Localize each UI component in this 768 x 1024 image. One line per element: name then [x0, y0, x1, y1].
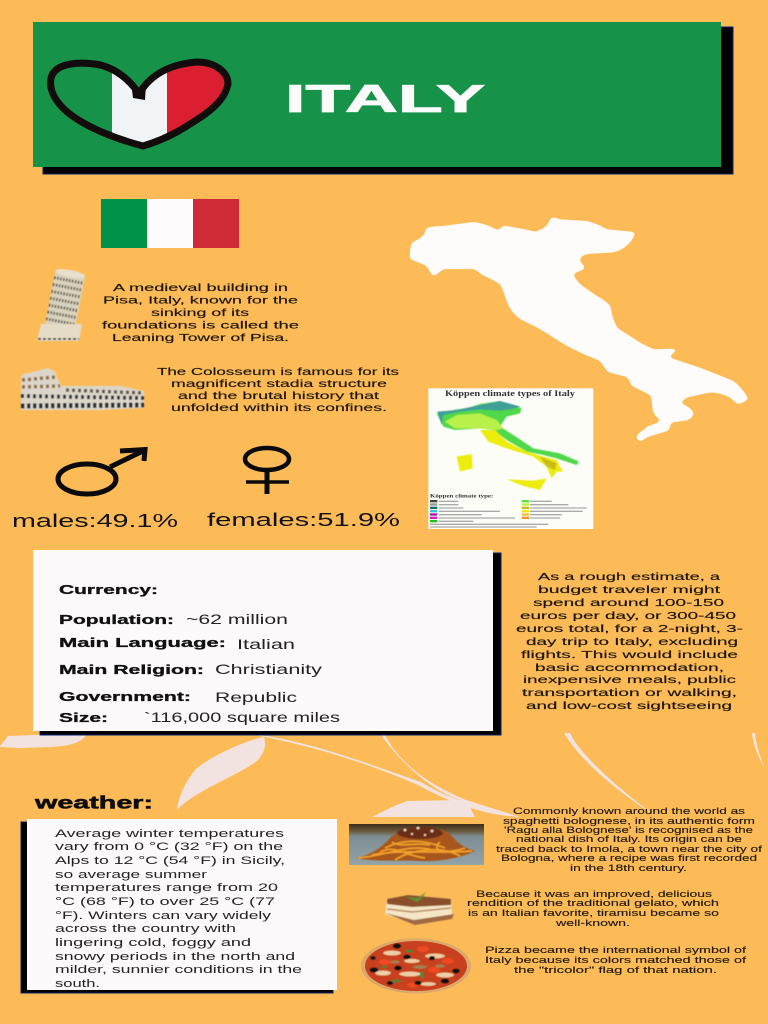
population row: ~62 million: [186, 611, 288, 627]
title text: ITALY: [285, 78, 485, 121]
size row: `116,000 square miles: [144, 709, 340, 725]
panel: weather: °C (68 °F) to over 25 °C (77: [55, 896, 275, 908]
text: travel budget: [516, 571, 744, 712]
climate map image: Köppen climate type:: [430, 495, 494, 500]
map of Italy: [410, 217, 748, 441]
text: Colosseum: The Colosseum is famous for its: [157, 366, 399, 378]
population row: [59, 611, 288, 627]
text: Leaning Tower: foundations is called the: [102, 320, 299, 332]
text: travel budget: euros total, for a 2-night, 3-: [516, 623, 744, 635]
panel: weather: so average summer: [55, 869, 207, 881]
panel: weather: milder, sunnier conditions in the: [55, 964, 302, 976]
religion row: [59, 661, 322, 677]
text: tiramisu: is an Italian favorite, tiramisu became so: [468, 908, 719, 919]
text: Colosseum: magnificent stadia structure: [171, 378, 387, 390]
text: spaghetti bolognese: 'Ragu alla Bolognese' is recognised as the: [504, 825, 753, 836]
currency row: Currency:: [59, 583, 158, 597]
text: Leaning Tower: sinking of its: [151, 307, 249, 319]
religion row: Main Religion:: [59, 663, 204, 677]
text: travel budget: inexpensive meals, public: [523, 674, 736, 686]
text: spaghetti bolognese: spaghetti bolognese, in its authentic form: [503, 816, 755, 827]
religion row: Christianity: [215, 661, 322, 677]
text: Colosseum: [157, 366, 399, 414]
text: spaghetti bolognese: Commonly known around the world as: [513, 806, 745, 817]
text: tiramisu: rendition of the traditional gelato, which: [467, 898, 719, 909]
government row: [59, 689, 297, 705]
image: tiramisu: [385, 892, 454, 925]
text: Colosseum: and the brutal history that: [178, 390, 379, 402]
icon: Leaning Tower of Pisa: [37, 267, 86, 341]
text: Leaning Tower: A medieval building in: [113, 282, 288, 294]
icon: Colosseum: [21, 368, 144, 410]
text: spaghetti bolognese: Bologna, where a recipe was first recorded: [501, 853, 757, 864]
size row: Size:: [59, 711, 108, 725]
icon: Italian flag: [101, 199, 239, 248]
text: spaghetti bolognese: traced back to Imola, a town near the city of: [496, 844, 762, 855]
panel: weather: lingering cold, foggy and: [55, 937, 251, 949]
icon: female symbol: [245, 448, 289, 494]
text: tiramisu: [467, 889, 719, 929]
panel: weather: [21, 819, 337, 993]
climate map image: [428, 388, 593, 529]
panel: weather: Alps to 12 °C (54 °F) in Sicily,: [55, 855, 285, 867]
icon: male symbol: [58, 450, 145, 494]
language row: Italian: [237, 636, 295, 652]
text: travel budget: As a rough estimate, a: [538, 571, 720, 583]
government row: Government:: [59, 690, 191, 704]
text: pizza: Pizza became the international symbol of: [485, 945, 746, 956]
text: pizza: Italy because its colors matched those of: [485, 955, 747, 966]
text: travel budget: basic accommodation,: [535, 662, 724, 674]
text: males percentage: males:49.1%: [12, 510, 178, 531]
text: Leaning Tower: [102, 282, 299, 344]
text: travel budget: transportation or walking,: [522, 687, 737, 699]
language row: [59, 636, 295, 652]
panel: weather: south.: [55, 978, 100, 990]
heading: weather: weather:: [33, 792, 153, 812]
climate map image: Köppen climate types of Italy: [445, 389, 575, 398]
panel: weather: Average winter temperatures: [55, 828, 284, 840]
text: tiramisu: well-known.: [555, 918, 630, 929]
icon: Italian flag heart: [47, 58, 232, 150]
panel: weather: across the country with: [55, 923, 236, 935]
panel: weather: vary from 0 °C (32 °F) on the: [55, 841, 283, 853]
image: spaghetti bolognese: [349, 824, 484, 865]
text: travel budget: spend around 100-150: [533, 597, 724, 609]
text: travel budget: day trip to Italy, excluding: [526, 636, 738, 648]
text: travel budget: budget traveler might: [538, 584, 720, 596]
text: Leaning Tower: Pisa, Italy, known for the: [103, 294, 298, 306]
panel: weather: snowy periods in the north and: [55, 951, 295, 963]
text: spaghetti bolognese: in the 18th century.: [570, 863, 687, 874]
text: spaghetti bolognese: national dish of Italy. Its origin can be: [516, 834, 742, 845]
text: females percentage: females:51.9%: [207, 509, 400, 530]
image: pizza: [361, 938, 471, 994]
panel: weather: °F). Winters can vary widely: [55, 910, 271, 922]
government row: Republic: [215, 689, 297, 705]
size row: [59, 709, 340, 725]
title banner: [33, 22, 733, 174]
panel: country facts: [33, 550, 501, 735]
text: travel budget: flights. This would include: [521, 649, 738, 661]
text: pizza: the "tricolor" flag of that nation.: [514, 965, 717, 976]
population row: Population:: [59, 613, 174, 627]
text: pizza: [485, 945, 747, 976]
text: Leaning Tower: Leaning Tower of Pisa.: [112, 332, 289, 344]
text: travel budget: and low-cost sightseeing: [526, 700, 732, 712]
text: spaghetti bolognese: [496, 806, 762, 874]
text: Colosseum: unfolded within its confines.: [171, 402, 387, 414]
text: tiramisu: Because it was an improved, delicious: [476, 889, 712, 900]
panel: weather: temperatures range from 20: [55, 882, 278, 894]
text: travel budget: euros per day, or 300-450: [520, 610, 736, 622]
language row: Main Language:: [59, 636, 226, 650]
decorative petals: [0, 733, 764, 817]
